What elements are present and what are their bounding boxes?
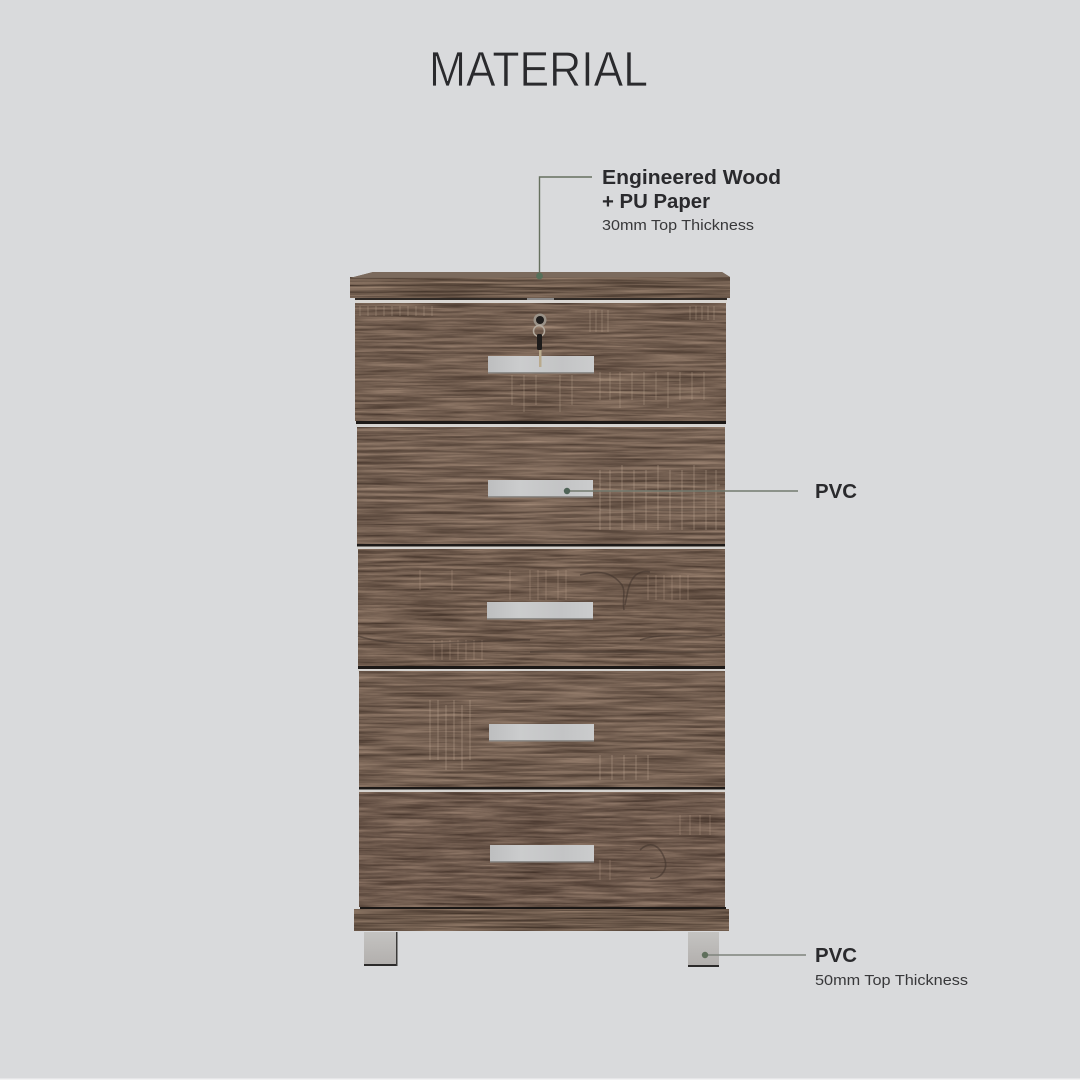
callout text: + PU Paper xyxy=(602,191,710,213)
callout text xyxy=(602,167,781,234)
callout: PVC leg xyxy=(702,945,968,989)
title: MATERIAL xyxy=(429,43,648,97)
drawer 1 xyxy=(355,303,726,421)
dark gap under top xyxy=(355,298,727,300)
callout text: PVC xyxy=(815,481,857,503)
callout text: 50mm Top Thickness xyxy=(815,972,968,989)
left leg xyxy=(364,932,398,966)
marker dot xyxy=(702,952,708,958)
gap 2 xyxy=(357,544,725,549)
lock and key xyxy=(534,314,546,367)
callout text xyxy=(815,945,968,989)
chest of drawers xyxy=(350,272,730,967)
callout: engineered wood top xyxy=(536,167,781,279)
dark gap above base xyxy=(360,907,726,909)
gap 4 xyxy=(359,787,725,792)
handle 1 xyxy=(488,356,594,374)
handle 4 xyxy=(489,724,594,742)
leader line xyxy=(705,954,806,956)
right leg xyxy=(688,932,719,967)
leader line xyxy=(540,177,592,276)
marker dot xyxy=(536,273,543,279)
gap 1 xyxy=(356,421,726,426)
leader line xyxy=(567,490,798,492)
marker dot xyxy=(564,488,570,494)
top panel xyxy=(350,272,730,298)
drawer 4 xyxy=(359,671,725,787)
gap 3 xyxy=(358,666,725,672)
handle 3 xyxy=(487,602,593,620)
drawer 2 xyxy=(357,427,725,544)
drawer 3 xyxy=(358,549,725,666)
handle 5 xyxy=(490,845,594,862)
drawer 5 xyxy=(359,792,725,907)
callout text: PVC xyxy=(815,945,857,967)
callout text: Engineered Wood xyxy=(602,167,781,189)
callout: PVC handle xyxy=(564,481,857,503)
handle 2 xyxy=(488,480,593,498)
base panel xyxy=(354,909,729,931)
callout text: 30mm Top Thickness xyxy=(602,217,754,234)
